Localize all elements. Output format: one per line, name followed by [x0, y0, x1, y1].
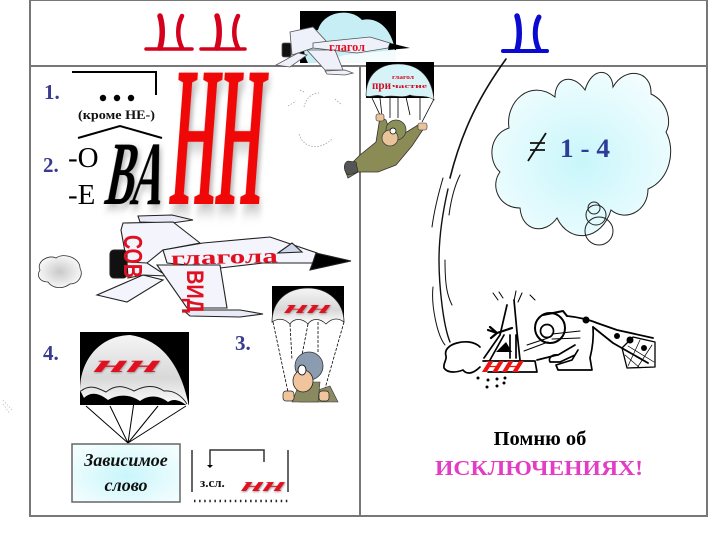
dependent word box — [72, 444, 180, 502]
broom — [484, 300, 520, 360]
paratrooper: prichastie: частие — [392, 84, 428, 90]
dependent word box: слово — [104, 475, 148, 495]
small plane with cloud: glagol: глагол — [329, 39, 365, 54]
small plane with cloud: glagol — [276, 11, 410, 75]
exceptions text: ИСКЛЮЧЕНИЯХ! — [435, 456, 643, 480]
parachute with dependent word — [80, 332, 189, 443]
basket — [622, 337, 655, 368]
paratrooper: prichastie — [344, 62, 434, 178]
except NE note: (кроме НЕ-) — [78, 108, 155, 122]
big red NN: НН — [165, 27, 273, 249]
cat sweeping — [444, 291, 655, 388]
swoosh from single N — [432, 59, 506, 345]
number 4: 4. — [43, 341, 59, 365]
number 1: 1. — [44, 80, 60, 104]
faint doodle at left margin — [3, 400, 12, 414]
dust cloud — [444, 342, 480, 373]
range 1-4: 1 - 4 — [560, 134, 610, 163]
not equal sign — [528, 133, 546, 161]
dependent word label: з.сл. — [200, 475, 225, 490]
small grey cloud — [38, 256, 81, 288]
paratrooper: prichastie: глагол — [392, 75, 415, 81]
dependent word box: Зависимое — [83, 450, 168, 470]
thought cloud — [492, 72, 671, 245]
parachutist with helmet: нн — [282, 298, 335, 317]
thought bubbles — [585, 202, 613, 245]
suffix E: -Е — [68, 179, 95, 211]
root caret — [78, 126, 162, 138]
header mark: blue single N — [503, 16, 547, 51]
suffix VA: ВА — [99, 123, 176, 224]
big plane: perfective verb — [97, 215, 351, 317]
scoop — [483, 355, 557, 372]
cat — [535, 313, 565, 343]
parachute with dependent word: нн — [90, 350, 166, 378]
header mark: red double N left — [146, 16, 192, 49]
label: sov: СОВ — [118, 235, 148, 278]
red single N under broom: нн — [479, 352, 528, 378]
remember text: Помню об — [494, 428, 586, 450]
number 2: 2. — [43, 153, 59, 177]
NN in scheme: нн — [238, 475, 289, 496]
label: vid: ВИД — [181, 270, 208, 313]
header mark: red double N right — [201, 16, 245, 49]
paratrooper: prichastie: при — [372, 78, 391, 92]
suffix O: -О — [68, 142, 99, 174]
parachutist with helmet — [272, 286, 344, 402]
condition 1 — [44, 72, 156, 122]
word scheme — [192, 450, 289, 501]
number 3: 3. — [235, 331, 251, 355]
label: glagola: глагола — [171, 245, 278, 270]
faint face doodle — [288, 90, 342, 147]
three dots — [100, 95, 134, 101]
bracket for dependent words — [72, 72, 156, 95]
condition 2 — [43, 123, 176, 224]
